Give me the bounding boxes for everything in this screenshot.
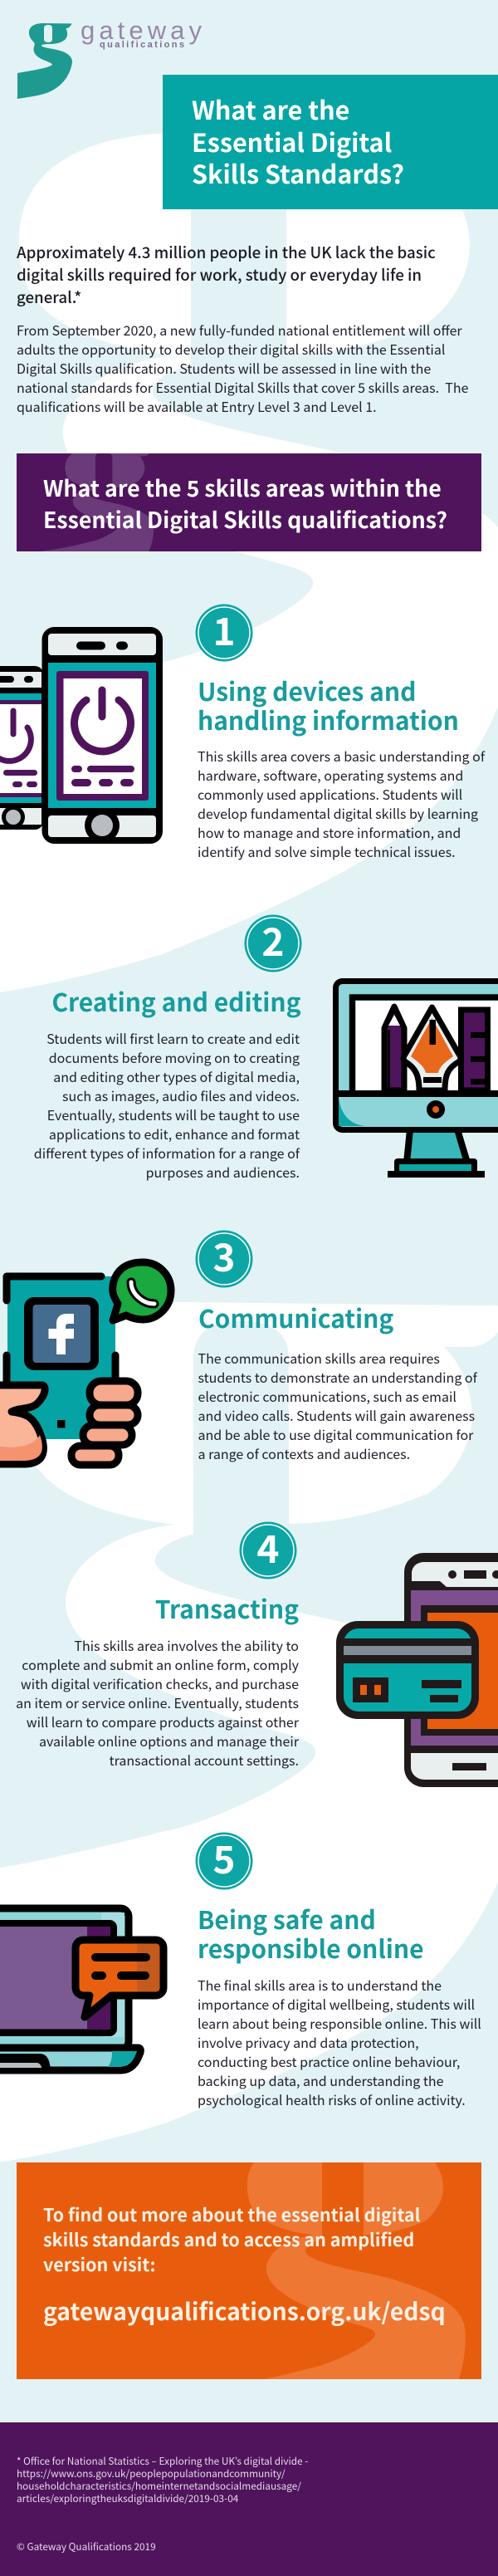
- skill 5 body: involve privacy and data protection,: [198, 2032, 419, 2052]
- front phone: [42, 627, 163, 844]
- skill 1 body: commonly used applications. Students will: [198, 784, 462, 804]
- intro body text: national standards for Essential Digital Skills that cover 5 skills areas. The: [17, 377, 469, 397]
- icon: WhatsApp bubble: [113, 1262, 171, 1320]
- skill 3 body: and video calls. Students will gain awareness: [198, 1405, 475, 1425]
- bank card: [336, 1621, 479, 1719]
- background: large white g shape lower: [0, 1302, 498, 2171]
- skill 2 number badge: 2: [261, 913, 285, 967]
- skill 4 illustration: phone and bank card: [336, 1556, 498, 1784]
- call-to-action panel: [17, 2162, 481, 2379]
- skill 5 body: conducting best practice online behaviour,: [198, 2051, 460, 2071]
- skill 1 body: This skills area covers a basic understanding of: [198, 746, 486, 766]
- call-to-action text: version visit:: [43, 2251, 156, 2277]
- skill 2 body: purposes and audiences.: [146, 1162, 300, 1182]
- skill 1 body: identify and solve simple technical issues.: [198, 841, 456, 861]
- skill 5 body: importance of digital wellbeing, students will: [198, 1994, 475, 2014]
- pen nib: [403, 1007, 461, 1090]
- skill 3 illustration: hand holding phone with social apps: [0, 1262, 171, 1465]
- skill 2 body: applications to edit, enhance and format: [49, 1124, 300, 1144]
- banner watermark g: [42, 453, 154, 551]
- intro body text: From September 2020, a new fully-funded national entitlement will offer: [17, 320, 462, 340]
- skill 3 body: The communication skills area requires: [198, 1348, 440, 1368]
- skill 5 heading: Being safe and: [198, 1900, 376, 1937]
- skill 1 body: [198, 746, 486, 861]
- skill 2 body: such as images, audio files and videos.: [62, 1085, 300, 1105]
- skill 3 body: students to demonstrate an understanding of: [198, 1367, 478, 1387]
- logo wordmark: gateway: [81, 16, 203, 45]
- pencil: [384, 1006, 404, 1090]
- skill 2 body: and editing other types of digital media,: [53, 1066, 300, 1086]
- skill 2 body: [34, 1028, 300, 1182]
- skill 5 body: [198, 1975, 481, 2109]
- skill 3 body: a range of contexts and audiences.: [198, 1443, 410, 1463]
- skill 1 number badge: [196, 602, 252, 661]
- skill 5 heading: responsible online: [198, 1929, 424, 1966]
- skill 2 body: Students will first learn to create and edit: [46, 1028, 300, 1048]
- title text: Skills Standards?: [192, 154, 404, 191]
- skill 3 number badge: [196, 1228, 252, 1287]
- skill 1 illustration: phones with power icon: [0, 627, 163, 844]
- skill 1 heading: Using devices and: [198, 672, 416, 708]
- skill 5 number badge: [196, 1830, 252, 1890]
- footnote source: [17, 2454, 308, 2505]
- skill 5 body: backing up data, and understanding the: [198, 2070, 444, 2090]
- skill 3 body: [198, 1348, 478, 1463]
- intro body text: adults the opportunity to develop their digital skills with the Essential: [17, 339, 445, 359]
- call-to-action text: skills standards and to access an amplified: [43, 2226, 414, 2252]
- skill 1 number badge: 1: [212, 602, 236, 657]
- footnote source: * Office for National Statistics – Exploring the UK’s digital divide -: [17, 2454, 308, 2468]
- skill 5 body: The final skills area is to understand the: [198, 1975, 442, 1995]
- title text: Essential Digital: [192, 123, 392, 159]
- skill 2 body: documents before moving on to creating: [49, 1047, 300, 1067]
- back phone: [0, 666, 43, 830]
- icon: chat bubble: [76, 1940, 164, 2017]
- skill 1 body: develop fundamental digital skills by learning: [198, 803, 478, 823]
- skill 1 body: hardware, software, operating systems and: [198, 765, 463, 785]
- copyright: © Gateway Qualifications 2019: [17, 2539, 156, 2554]
- phone body: [7, 1276, 115, 1439]
- ruler: [461, 1010, 488, 1090]
- skill 2 number badge: [244, 913, 302, 972]
- skill 4 body: will learn to compare products against other: [27, 1712, 300, 1731]
- skill 4 number badge: 4: [256, 1520, 280, 1574]
- laptop base: [0, 2048, 140, 2070]
- monitor screen: [352, 997, 498, 1094]
- logo strapline: qualifications: [100, 40, 184, 50]
- footnote source: https://www.ons.gov.uk/peoplepopulationandcommunity/: [17, 2466, 286, 2481]
- website address: gatewayqualifications.org.uk/edsq: [43, 2294, 446, 2328]
- icon: Facebook tile: [24, 1297, 99, 1370]
- skill 4 body: transactional account settings.: [110, 1750, 299, 1770]
- title panel: [163, 75, 498, 209]
- intro lead text: digital skills required for work, study or everyday life in: [17, 263, 422, 286]
- skill 5 number badge: 5: [212, 1830, 236, 1885]
- skill 3 number badge: 3: [212, 1228, 236, 1283]
- skill 5 heading: [198, 1900, 424, 1966]
- call-to-action text: [43, 2201, 421, 2277]
- skill 3 body: and be able to use digital communication for: [198, 1424, 474, 1444]
- banner text: What are the 5 skills areas within the: [43, 471, 442, 503]
- skill 4 body: an item or service online. Eventually, students: [16, 1692, 299, 1712]
- monitor body: [335, 982, 498, 1129]
- banner text: [43, 471, 447, 535]
- footer panel: [0, 2422, 498, 2576]
- intro body text: Digital Skills qualification. Students will be assessed in line with the: [17, 358, 431, 378]
- skill 5 body: learn about being responsible online. This will: [198, 2013, 481, 2033]
- monitor stand: [407, 1129, 467, 1163]
- title text: What are the: [192, 91, 349, 127]
- intro body text: [17, 320, 469, 416]
- skill 4 body: [16, 1635, 300, 1770]
- skill 4 body: This skills area involves the ability to: [74, 1635, 299, 1655]
- logo mark: [17, 23, 72, 99]
- skill 3 body: electronic communications, such as email: [198, 1386, 456, 1406]
- skill 2 heading: Creating and editing: [51, 982, 301, 1019]
- logo: Gateway Qualifications: [17, 16, 203, 99]
- skill 2 body: different types of information for a range of: [34, 1143, 300, 1163]
- intro lead text: Approximately 4.3 million people in the UK lack the basic: [17, 241, 436, 263]
- skill 4 body: complete and submit an online form, comply: [22, 1654, 300, 1674]
- call-to-action text: To find out more about the essential digital: [43, 2201, 421, 2227]
- skill 3 heading: Communicating: [198, 1299, 393, 1335]
- intro lead text: [17, 241, 436, 308]
- skill 1 heading: handling information: [198, 701, 459, 737]
- skill 2 illustration: monitor with design tools: [335, 982, 498, 1178]
- skill 5 illustration: laptop with chat bubble: [0, 1908, 164, 2074]
- skill 4 body: with digital verification checks, and purchase: [21, 1673, 299, 1693]
- hand: palm and thumb: [0, 1385, 45, 1464]
- question banner: [17, 453, 481, 551]
- skill 1 body: how to manage and store information, and: [198, 822, 461, 842]
- phone: [408, 1556, 498, 1784]
- skill 4 body: available online options and manage their: [39, 1731, 300, 1751]
- intro lead text: general.*: [17, 286, 81, 308]
- title text: [192, 91, 404, 191]
- skill 2 body: Eventually, students will be taught to use: [47, 1104, 300, 1124]
- skill 5 body: psychological health risks of online activity.: [198, 2089, 466, 2109]
- skill 1 heading: [198, 672, 459, 737]
- banner text: Essential Digital Skills qualifications?: [43, 502, 447, 535]
- panel watermark g: [247, 2162, 466, 2379]
- footnote source: householdcharacteristics/homeinternetandsocialmediausage/: [17, 2479, 301, 2493]
- skill 4 heading: Transacting: [155, 1589, 299, 1626]
- intro body text: qualifications will be available at Entry Level 3 and Level 1.: [17, 396, 377, 416]
- background: large white g shape upper: [0, 133, 498, 1002]
- hand: fingers: [71, 1381, 138, 1465]
- laptop lid: [0, 1908, 129, 2050]
- skill 4 number badge: [239, 1520, 297, 1579]
- footnote source: articles/exploringtheuksdigitaldivide/2019-03-04: [17, 2491, 239, 2505]
